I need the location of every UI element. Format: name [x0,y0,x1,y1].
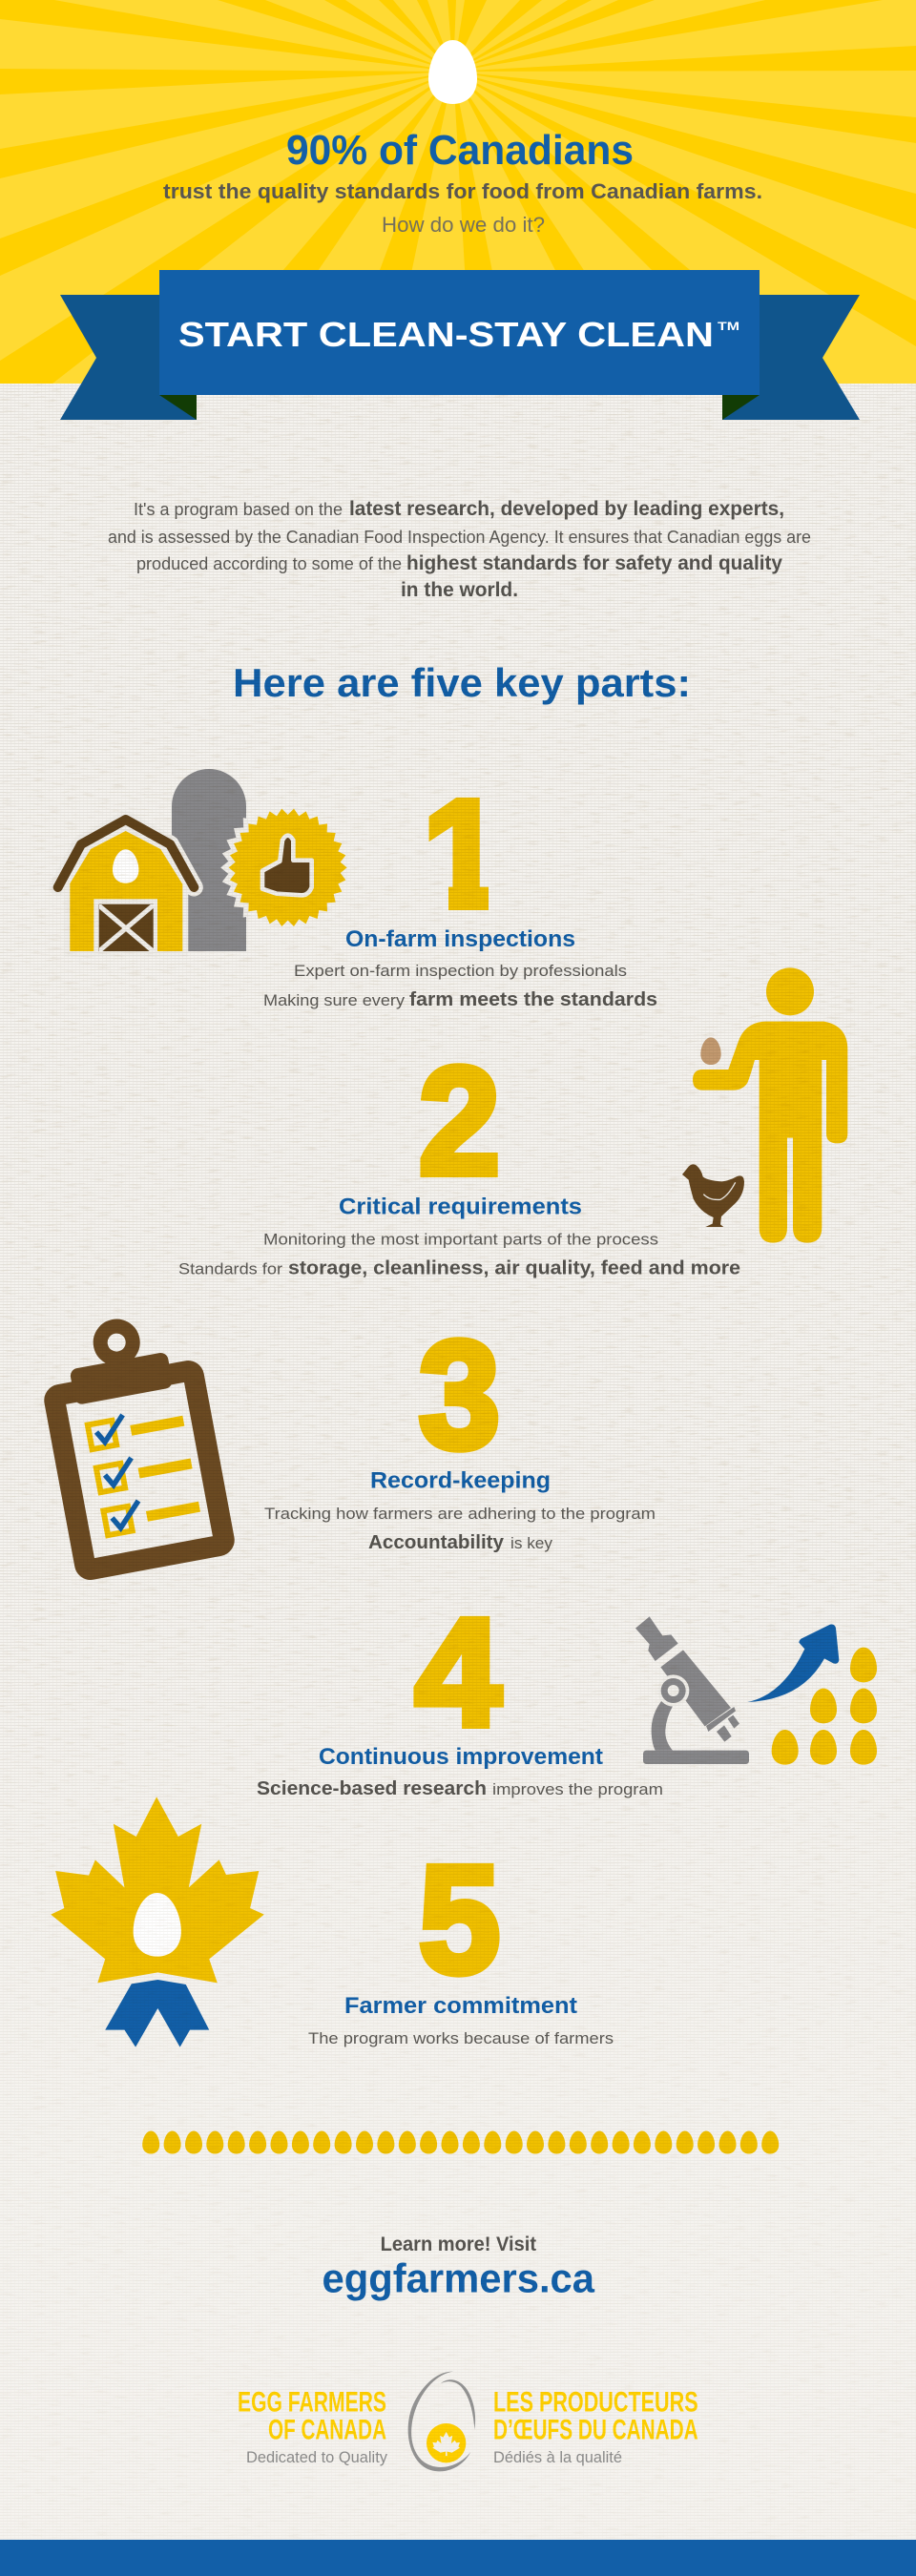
barn body [70,831,182,951]
panel: step 2 text: Standards for [178,1259,282,1278]
thumbs-up badge [229,809,347,926]
panel: step 5 text [308,1993,614,2047]
panel: intro text [108,498,811,601]
panel: intro text: and is assessed by the Canadian Food Inspection Agency. It ensures that Canadian eggs are [108,528,811,547]
panel: step 2 text: storage, cleanliness, air quality, feed and more [288,1257,740,1278]
panel: step 3 text: is key [510,1534,552,1552]
call to action: Learn more! Visit [381,2233,536,2255]
panel: step 1 text: Making sure every [263,991,406,1009]
icon: clipboard checklist [43,1314,225,1570]
blue arrow [747,1624,839,1702]
banner title: START CLEAN-STAY CLEAN [178,315,714,354]
panel: step 3 text: Tracking how farmers are adhering to the program [264,1505,656,1523]
silo [172,769,246,951]
icon: white egg [428,40,477,104]
farmer body [693,1022,847,1243]
logo: Egg Farmers of Canada [238,2372,698,2471]
question: How do we do it? [382,213,545,237]
hen [682,1164,744,1227]
banner ribbon [60,270,860,420]
icon: barn, silo and thumbs-up badge [58,769,347,954]
panel: sunburst header [0,0,916,384]
logo egg emblem [408,2372,475,2471]
ribbon [105,1980,209,2047]
panel: intro text: latest research, developed by leading experts, [349,498,784,520]
panel: step 4 text: improves the program [492,1780,663,1798]
egg stack [772,1648,877,1765]
clipboard ring [97,1323,135,1361]
right tail [722,295,860,420]
logo: Egg Farmers of Canada: LES PRODUCTEURS [493,2387,698,2419]
logo: Egg Farmers of Canada: Dédiés à la qualité [493,2448,622,2466]
check boxes [88,1421,133,1535]
title: 90% of Canadians: 90% of Canadians [286,127,634,174]
panel: step 3 text: Record-keeping [370,1468,551,1494]
list lines [130,1416,200,1522]
logo: Egg Farmers of Canada: D’ŒUFS DU CANADA [493,2415,698,2446]
panel: step 2 text: Monitoring the most important parts of the process [263,1231,658,1248]
icon: farmer holding egg with hen [682,967,847,1243]
panel: step 1 text: farm meets the standards [409,989,657,1010]
panel: step 2 text [178,1195,740,1278]
clipboard clip [70,1352,174,1405]
trademark: TM [718,320,739,333]
panel: intro text: produced according to some of the [136,554,402,573]
maple leaf [51,1797,264,1983]
left fold [159,395,197,420]
clipboard board [53,1370,225,1570]
panel: step 4 text: Continuous improvement [319,1744,603,1770]
brown egg [700,1037,721,1065]
panel: step 1 text: On-farm inspections [345,926,575,952]
farmer head [766,967,814,1015]
panel: step 5 text: Farmer commitment [344,1993,577,2019]
number 5: 5 [419,1834,500,2005]
panel: step 1 text [263,926,657,1010]
number 1: 1 [423,768,503,939]
panel: step 2 text: Critical requirements [339,1195,582,1220]
panel: step 5 text: The program works because of farmers [308,2029,614,2047]
call to action [323,2233,595,2302]
icon: microscope, arrow and eggs [635,1616,877,1765]
heading: five key parts: Here are five key parts: [233,660,691,705]
panel: step 4 text: Science-based research [257,1778,487,1799]
panel: step 4 text [257,1744,663,1799]
subtitle: trust the quality standards for food from Canadian farms. [163,179,762,203]
barn door [94,899,157,954]
panel: intro text: in the world. [401,579,518,601]
panel: intro text: highest standards for safety and quality [406,552,782,574]
website: eggfarmers.ca [323,2256,595,2302]
logo: Egg Farmers of Canada: EGG FARMERS [238,2387,386,2419]
blue ticks [96,1415,138,1528]
logo: Egg Farmers of Canada: Dedicated to Quality [246,2448,387,2466]
microscope [635,1616,749,1764]
row of eggs [142,2131,779,2154]
barn roof [58,820,194,887]
right fold [722,395,760,420]
logo: Egg Farmers of Canada: OF CANADA [268,2415,386,2446]
barn outline [70,831,182,951]
panel: step 1 text: Expert on-farm inspection by professionals [294,962,627,980]
number 4: 4 [415,1587,501,1757]
barn egg [113,849,138,883]
thumb [262,836,312,895]
panel: intro text: It's a program based on the [134,500,343,519]
icon: maple leaf award [51,1797,264,2047]
left tail [60,295,197,420]
panel: step 3 text: Accountability [368,1532,505,1553]
footer bar [0,2540,916,2576]
badge outline over silo [220,818,246,918]
panel: step 3 text [264,1468,656,1553]
award egg [134,1893,181,1957]
number 2: 2 [419,1035,500,1206]
main band [159,270,760,395]
number 3: 3 [419,1309,500,1480]
